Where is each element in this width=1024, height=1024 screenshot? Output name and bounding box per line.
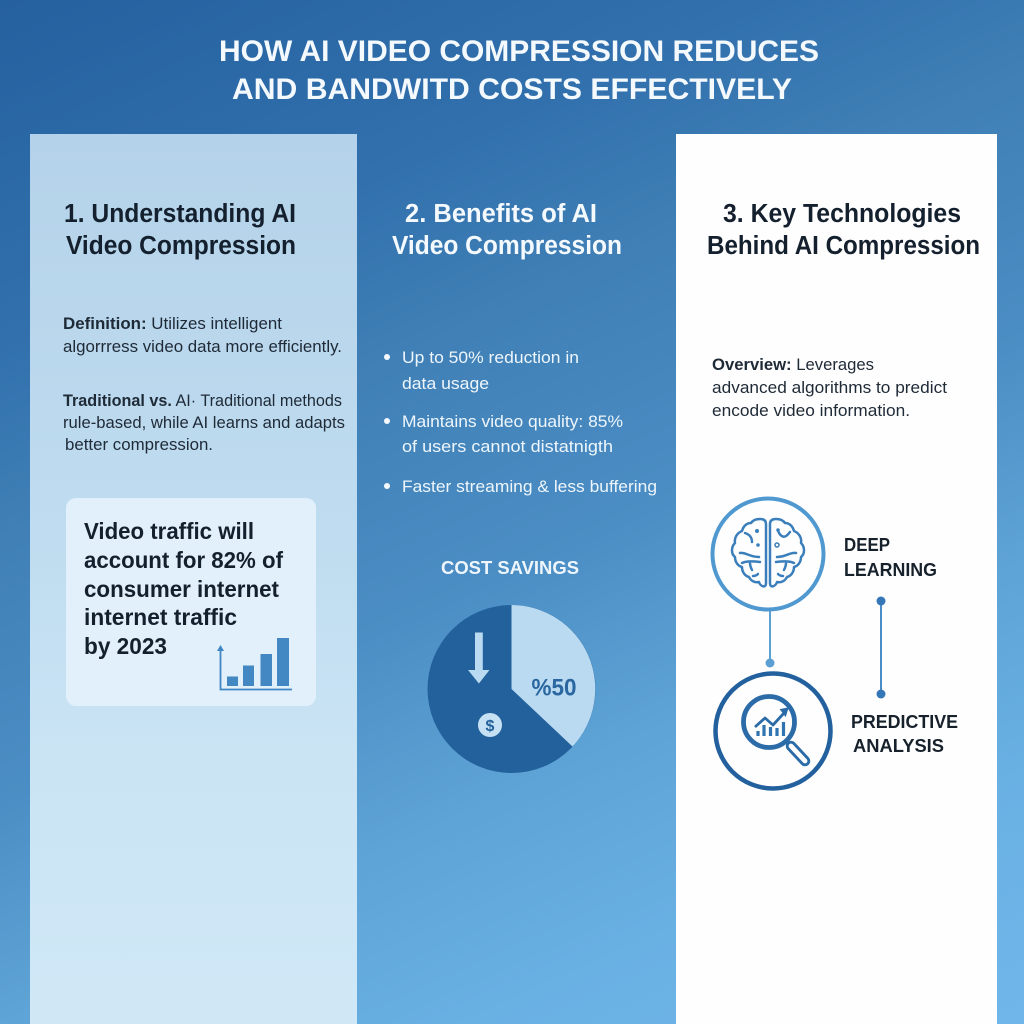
text block: definition (63, 315, 342, 356)
pie label: %50 (532, 674, 576, 702)
heading: section 1 (64, 200, 296, 260)
bullet: video quality: Maintains video quality: 85% (402, 413, 623, 431)
label: deep learning: LEARNING (844, 560, 937, 580)
heading: cost savings: COST SAVINGS (441, 558, 579, 578)
label: predictive analysis (851, 712, 958, 756)
text block: definition: algorrress video data more efficiently. (63, 338, 342, 356)
heading: section 3: Behind AI Compression (707, 232, 980, 260)
callout text: Video traffic will (84, 518, 254, 544)
heading: section 1: Video Compression (66, 232, 296, 260)
heading: section 3 (707, 200, 980, 260)
text block: traditional vs AI: Traditional vs. AI· Traditional methods (63, 392, 342, 410)
label: predictive analysis: PREDICTIVE (851, 712, 958, 732)
text block: definition: Definition: Utilizes intelligent (63, 315, 282, 333)
callout text (84, 518, 283, 659)
panel: benefits of AI video compression (384, 200, 657, 773)
callout text: consumer internet (84, 576, 279, 602)
label: deep learning: DEEP (844, 535, 890, 555)
heading: section 2: 2. Benefits of AI (405, 200, 597, 228)
title (219, 35, 819, 106)
text block: traditional vs AI (63, 392, 345, 454)
icon: magnifier with chart (716, 674, 830, 788)
label: predictive analysis: ANALYSIS (853, 736, 944, 756)
panel: understanding AI video compression (30, 134, 357, 1024)
bullet: data usage (384, 349, 579, 393)
text block: overview (712, 356, 947, 420)
title: HOW AI VIDEO COMPRESSION REDUCES (219, 35, 819, 68)
callout: video traffic stat (66, 498, 316, 706)
icon: dollar coin (478, 713, 502, 737)
callout text: internet traffic (84, 604, 237, 630)
text block: traditional vs AI: better compression. (65, 436, 213, 454)
title: AND BANDWITD COSTS EFFECTIVELY (232, 73, 792, 106)
icon: down arrow (468, 632, 490, 684)
text block: overview: Overview: Leverages (712, 356, 874, 374)
callout text: by 2023 (84, 633, 167, 659)
text block: overview: encode video information. (712, 402, 910, 420)
connector: brain to magnifier (766, 611, 774, 668)
connector: labels (876, 596, 886, 698)
bullet: data usage: data usage (402, 375, 489, 393)
bullet: data usage: Up to 50% reduction in (402, 349, 579, 367)
callout text: account for 82% of (84, 547, 283, 573)
icon: dollar coin: $ (486, 718, 495, 735)
bullet: faster streaming: Faster streaming & less buffering (402, 478, 657, 496)
heading: section 2: Video Compression (392, 232, 622, 260)
heading: section 2 (392, 200, 622, 260)
heading: section 1: 1. Understanding AI (64, 200, 296, 228)
bullet: video quality (384, 413, 623, 456)
text block: overview: advanced algorithms to predict (712, 379, 947, 397)
icon: brain (712, 498, 824, 610)
label: deep learning (844, 535, 937, 580)
pie chart: cost savings (428, 605, 596, 773)
icon: bar chart (217, 638, 292, 690)
panel: key technologies (676, 134, 997, 1024)
text block: traditional vs AI: rule-based, while AI learns and adapts (63, 414, 345, 432)
bullet: video quality: of users cannot distatnigth (402, 438, 613, 456)
heading: section 3: 3. Key Technologies (723, 200, 961, 228)
